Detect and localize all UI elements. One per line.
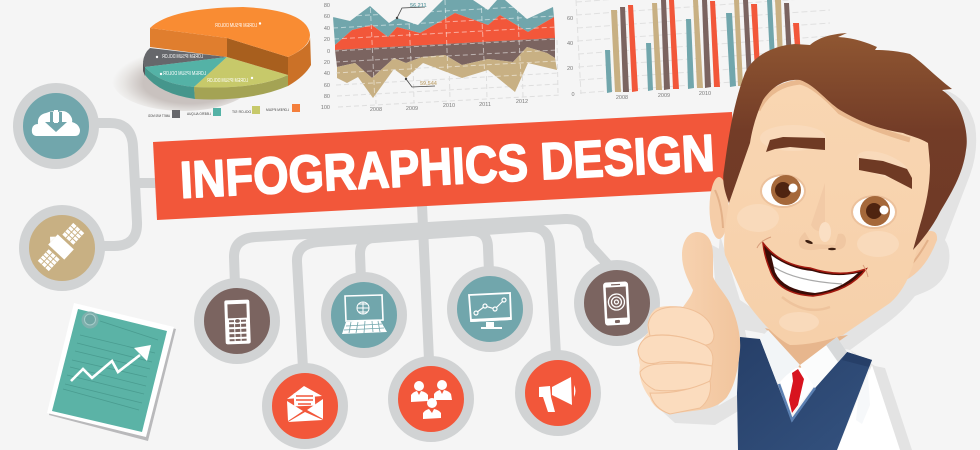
shirt front xyxy=(780,368,814,414)
series: brown xyxy=(335,38,555,78)
smile xyxy=(757,237,868,310)
thumbs up hand xyxy=(638,232,740,414)
y axis labels: 80 xyxy=(324,94,330,100)
connector lines xyxy=(96,123,611,368)
icon: cloud download xyxy=(18,88,94,164)
shirt and vest xyxy=(718,328,900,450)
x axis labels: 2010 xyxy=(699,91,711,97)
rising arrow xyxy=(71,345,151,381)
right eye xyxy=(851,195,897,229)
y axis labels: 60 xyxy=(324,83,330,89)
vest xyxy=(737,337,872,450)
pie labels xyxy=(156,22,261,84)
y axis labels: 60 xyxy=(567,16,573,22)
y axis labels: 60 xyxy=(324,14,330,20)
vest v border xyxy=(779,384,815,420)
nose xyxy=(799,183,846,250)
x axis labels: 2010 xyxy=(443,103,455,109)
bars 2011 xyxy=(726,0,760,87)
ear left xyxy=(710,177,728,239)
icon: people xyxy=(393,361,469,437)
y axis labels xyxy=(567,16,575,98)
pie legend: DOLOR SIT xyxy=(231,110,251,114)
pie legend xyxy=(148,104,300,118)
y axis labels: 40 xyxy=(324,71,330,77)
x axis labels: 2011 xyxy=(479,102,491,108)
right eyebrow xyxy=(859,158,912,189)
icon: envelope xyxy=(267,368,343,444)
y axis labels: 20 xyxy=(567,66,573,72)
pie legend: LIBERO ALIQUA xyxy=(186,112,211,116)
pie shadow xyxy=(112,49,254,111)
hairline shadow xyxy=(758,82,910,140)
bars 2012 xyxy=(767,0,801,60)
pin xyxy=(82,312,98,328)
head xyxy=(710,33,967,345)
pie labels: LOREM IPSUM DOLOR xyxy=(163,71,206,77)
title: INFOGRAPHICS DESIGN xyxy=(179,125,716,210)
slice: green xyxy=(194,57,288,99)
icon: satellite xyxy=(24,210,100,286)
y axis labels: 0 xyxy=(327,49,330,55)
tie xyxy=(789,369,804,413)
fingers xyxy=(638,307,714,414)
y axis labels: 20 xyxy=(324,60,330,66)
x axis labels xyxy=(370,99,528,113)
pie labels: LOREM IPSUM DOLOR xyxy=(215,23,257,29)
y axis labels: 40 xyxy=(324,26,330,32)
character shadow xyxy=(655,90,976,450)
bars 2009 xyxy=(646,0,679,91)
shirt xyxy=(837,365,900,450)
x axis labels: 2009 xyxy=(406,106,418,112)
pie legend: LOREM IPSUM xyxy=(266,108,289,112)
icon: mobile phone xyxy=(199,283,275,359)
y axis labels: 80 xyxy=(324,3,330,9)
y axis labels: 40 xyxy=(567,41,573,47)
x axis labels: 2009 xyxy=(658,93,670,99)
icon: laptop xyxy=(326,277,402,353)
bars 2008 xyxy=(605,5,638,93)
icon: smartphone xyxy=(579,265,655,341)
sticky note xyxy=(47,303,176,441)
left eye xyxy=(760,174,806,208)
series: tan xyxy=(337,47,557,98)
series: red xyxy=(335,13,555,50)
y axis labels xyxy=(321,3,330,111)
pie chart xyxy=(112,7,311,118)
face xyxy=(724,80,932,345)
icon: monitor chart xyxy=(452,271,528,347)
bars 2010 xyxy=(686,0,720,89)
slice: teal xyxy=(145,57,227,99)
y axis labels: 20 xyxy=(324,37,330,43)
y axis labels: 100 xyxy=(321,105,330,111)
collar left xyxy=(760,330,800,383)
area chart xyxy=(321,0,560,113)
x axis labels xyxy=(616,91,711,101)
callout: 56,211: 56,211 xyxy=(410,3,427,9)
callout: 59,544 xyxy=(405,78,438,87)
hair xyxy=(723,33,967,250)
callout: 59,544: 59,544 xyxy=(420,81,438,87)
x axis labels: 2012 xyxy=(516,99,528,105)
y axis labels: 0 xyxy=(571,92,575,98)
bar chart xyxy=(567,0,830,101)
pie labels: LOREM IPSUM DOLOR xyxy=(207,78,248,84)
pie labels: LOREM IPSUM DOLOR xyxy=(162,54,203,60)
slice: gray xyxy=(143,48,227,76)
callout: 56,211 xyxy=(396,3,427,19)
series: teal xyxy=(333,0,554,45)
x axis labels: 2008 xyxy=(616,95,628,101)
x axis labels: 2008 xyxy=(370,107,382,113)
pie legend: AMET NISI MOD xyxy=(148,114,170,118)
banner xyxy=(153,112,736,220)
ear right xyxy=(902,231,937,282)
neck xyxy=(765,328,848,368)
collar right xyxy=(800,337,847,388)
chin and cheek highlights xyxy=(737,125,912,332)
left eyebrow xyxy=(766,137,825,152)
slice: orange xyxy=(150,7,311,86)
icon: megaphone xyxy=(520,355,596,431)
